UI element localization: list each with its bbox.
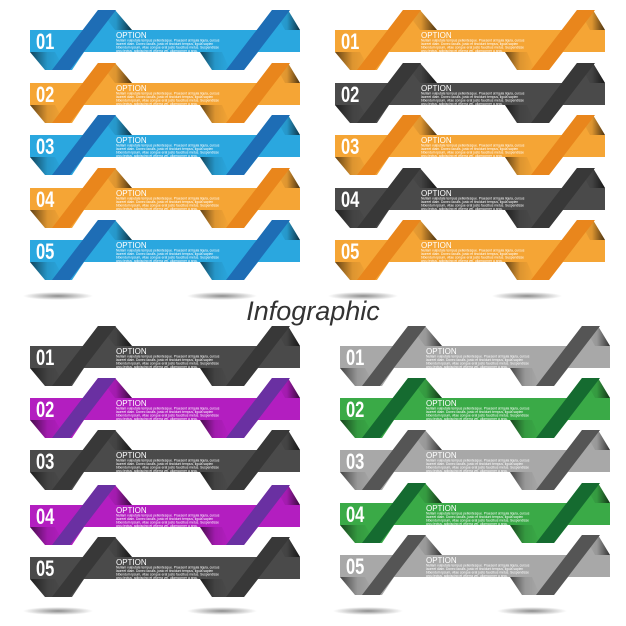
row 02 (335, 63, 605, 123)
row 05: 05 (341, 240, 360, 265)
row 03 (335, 115, 605, 175)
row 02 (340, 378, 610, 438)
title: Infographic (246, 296, 380, 326)
row 01 (30, 326, 300, 386)
row 01 (335, 10, 605, 70)
shadows (23, 292, 567, 615)
row 03 (340, 430, 610, 490)
row 02: 02 (341, 83, 360, 108)
panel: grey/green bottom-right (340, 326, 610, 595)
row 01 (340, 326, 610, 386)
row 04: 04 (36, 505, 55, 530)
row 04 (30, 485, 300, 545)
row 01: 01 (36, 346, 55, 371)
row 03: 03 (36, 135, 55, 160)
row 01: 01 (36, 30, 55, 55)
row 05 (335, 220, 605, 280)
row 04: 04 (341, 188, 360, 213)
row 05: 05 (346, 555, 365, 580)
row 02: 02 (36, 83, 55, 108)
row 04 (335, 168, 605, 228)
row 02: 02 (36, 398, 55, 423)
row 03: 03 (341, 135, 360, 160)
row 04 (30, 168, 300, 228)
row 05 (340, 535, 610, 595)
row 05 (30, 537, 300, 597)
row 02: 02 (346, 398, 365, 423)
row 01: 01 (341, 30, 360, 55)
row 04 (340, 483, 610, 543)
panel: dark/purple bottom-left (30, 326, 300, 597)
row 01 (30, 10, 300, 70)
panel: blue/orange top-left (30, 10, 300, 280)
row 05: 05 (36, 240, 55, 265)
row 05 (30, 220, 300, 280)
row 03 (30, 115, 300, 175)
row 01: 01 (346, 346, 365, 371)
row 03: 03 (346, 450, 365, 475)
panel: orange/dark top-right (335, 10, 605, 280)
row 02 (30, 378, 300, 438)
row 03: 03 (36, 450, 55, 475)
row 02 (30, 63, 300, 123)
row 05: 05 (36, 557, 55, 582)
row 04: 04 (346, 503, 365, 528)
row 04: 04 (36, 188, 55, 213)
row 03 (30, 430, 300, 490)
